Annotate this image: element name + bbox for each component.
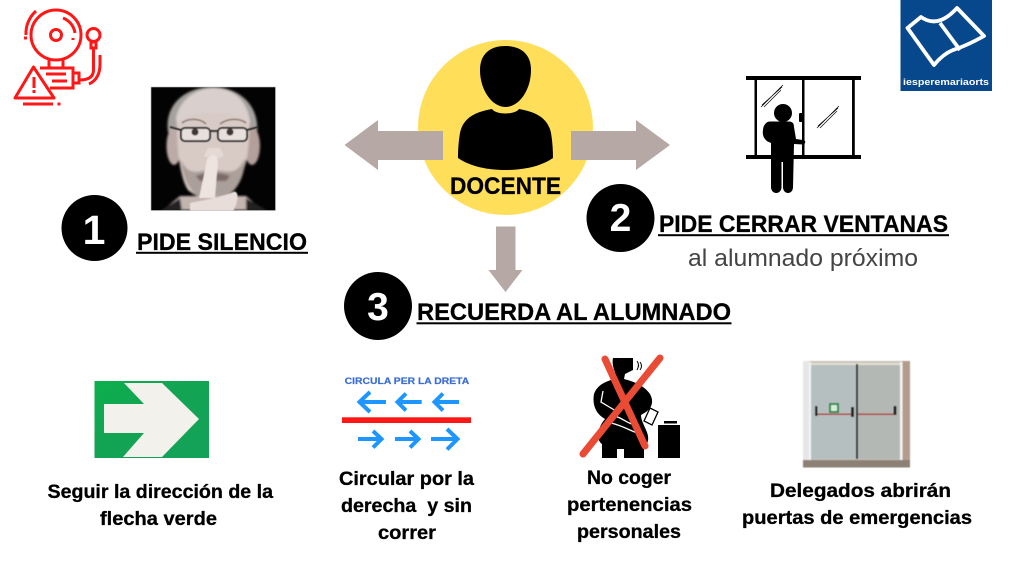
text: no coger pertenencias: personales xyxy=(577,521,681,543)
text: seguir la flecha: Seguir la dirección de la xyxy=(48,481,273,503)
text: circular por la derecha: Circular por la xyxy=(339,468,474,490)
text: al alumnado proximo: al alumnado próximo xyxy=(688,245,918,272)
heading: recuerda al alumnado: RECUERDA AL ALUMNADO xyxy=(417,299,731,326)
arrow: down xyxy=(488,226,522,292)
arrow: left xyxy=(344,120,443,170)
logo: iesperemariaorts: iesperemariaorts xyxy=(903,77,989,88)
photo: emergency doors xyxy=(803,361,910,468)
arrow: right xyxy=(571,120,670,170)
text: circular por la derecha xyxy=(339,468,474,544)
text: delegados abriran: puertas de emergencias xyxy=(742,507,972,529)
icon: number 1 badge: 1 xyxy=(83,207,105,253)
icon: number 3 badge xyxy=(344,272,412,340)
icon: teacher in yellow circle: DOCENTE xyxy=(450,173,561,200)
heading: pide cerrar ventanas: PIDE CERRAR VENTANAS xyxy=(659,211,948,238)
text: circular por la derecha: correr xyxy=(378,522,436,544)
text: delegados abriran: Delegados abrirán xyxy=(770,480,951,502)
heading: pide silencio: PIDE SILENCIO xyxy=(137,229,307,256)
icon: keep right sign xyxy=(342,376,471,450)
text: no coger pertenencias: pertenencias xyxy=(567,494,692,516)
text: no coger pertenencias xyxy=(567,467,692,543)
icon: red alarm bell xyxy=(15,10,100,104)
icon: number 2 badge xyxy=(586,184,654,252)
text: seguir la flecha: flecha verde xyxy=(100,508,217,530)
icon: person closing window xyxy=(746,76,861,193)
icon: teacher in yellow circle xyxy=(418,40,593,215)
icon: keep right sign: CIRCULA PER LA DRETA xyxy=(345,376,470,386)
text: no coger pertenencias: No coger xyxy=(587,467,671,489)
photo: man asking for silence xyxy=(151,87,276,211)
text: seguir la flecha xyxy=(48,481,273,530)
text: delegados abriran xyxy=(742,480,972,529)
icon: green arrow sign xyxy=(94,381,209,458)
icon: number 2 badge: 2 xyxy=(610,197,631,240)
text: circular por la derecha: derecha y sin xyxy=(341,495,472,517)
icon: crossed out person with belongings xyxy=(583,358,680,458)
icon: number 3 badge: 3 xyxy=(367,286,389,329)
logo: iesperemariaorts xyxy=(900,0,992,91)
icon: number 1 badge xyxy=(62,195,128,261)
